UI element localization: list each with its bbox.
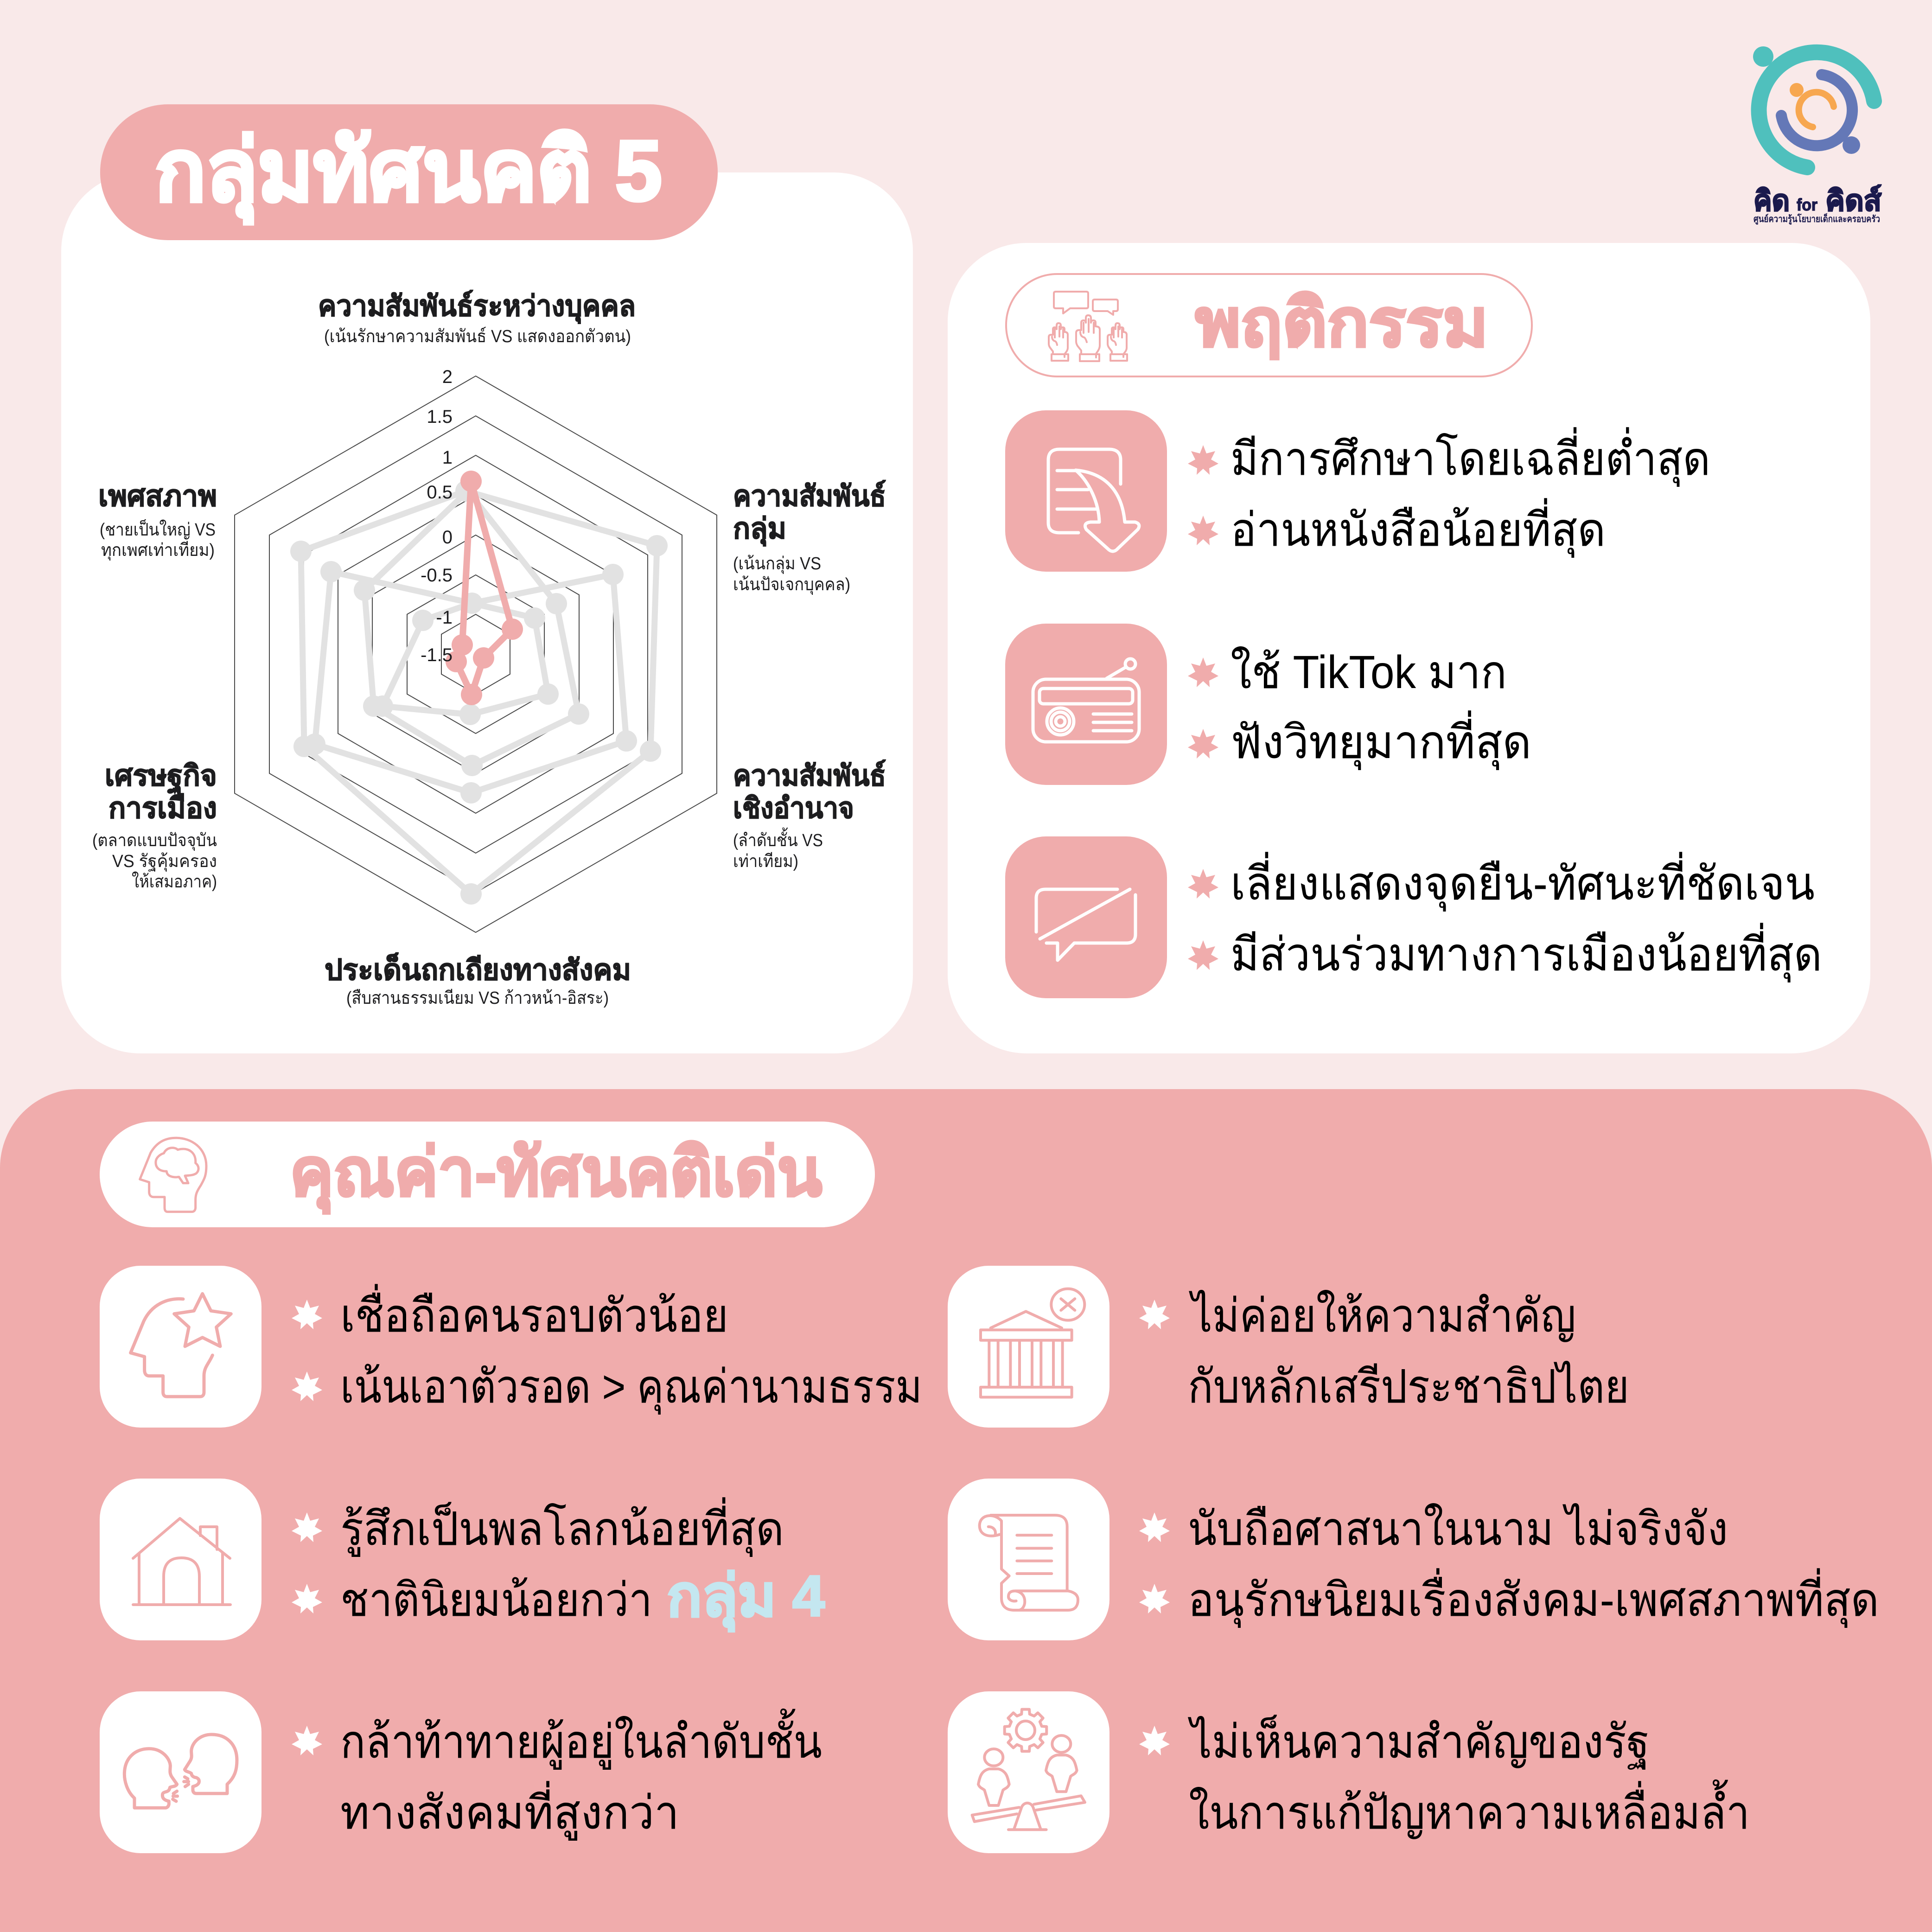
star bullet [1139, 1584, 1170, 1613]
axis label: upper left: (ชายเป็นใหญ่ VS [100, 519, 216, 540]
axis label: upper right [733, 480, 886, 595]
star bullet [1139, 1726, 1170, 1755]
logo wordmark: คิด [1753, 185, 1790, 217]
behaviour row: media [1005, 624, 1531, 785]
axis tick labels: -1 [436, 607, 453, 628]
axis tick labels: 2 [442, 367, 453, 387]
text: ทางสังคมที่สูงกว่า [340, 1781, 679, 1841]
star bullet [292, 1584, 322, 1613]
axis label: bottom: (สืบสานธรรมเนียม VS ก้าวหน้า-อิสระ) [346, 988, 609, 1008]
panel: radar chart card [61, 172, 913, 1053]
axis label: top: ความสัมพันธ์ระหว่างบุคคล [318, 290, 636, 324]
text: เน้นเอาตัวรอด > คุณค่านามธรรม [340, 1361, 922, 1415]
icon: house [133, 1518, 230, 1605]
axis label: lower left: การเมือง [108, 792, 217, 824]
axis label: bottom: ประเด็นถกเถียงทางสังคม [325, 952, 631, 986]
text: เชื่อถือคนรอบตัวน้อย [340, 1284, 728, 1342]
text: รู้สึกเป็นพลโลกน้อยที่สุด [340, 1497, 784, 1557]
star bullet [292, 1726, 322, 1755]
axis tick labels: 1 [442, 447, 453, 468]
logo [1753, 46, 1881, 225]
icon: document with down arrow [1048, 449, 1139, 551]
text: กล้าท้าทายผู้อยู่ในลำดับชั้น [340, 1709, 822, 1770]
axis label: upper left: ทุกเพศเท่าเทียม) [101, 541, 215, 561]
star bullet [1188, 940, 1218, 970]
axis tick labels: 0 [442, 527, 453, 548]
text: ไม่ค่อยให้ความสำคัญ [1189, 1290, 1576, 1342]
title: กลุ่มทัศนคติ 5 [155, 123, 662, 224]
logo wordmark [1753, 185, 1881, 225]
icon: scroll [980, 1515, 1078, 1610]
behaviour heading pill [1006, 274, 1532, 376]
axis label: upper left [98, 480, 217, 561]
star bullet [1188, 516, 1218, 545]
star bullet [1188, 729, 1218, 759]
values row: challenging hierarchy [100, 1691, 822, 1853]
values heading pill [100, 1122, 875, 1227]
icon: raised hands with speech bubbles [1049, 292, 1127, 361]
axis label: lower left: ให้เสมอภาค) [132, 872, 217, 892]
icon: crossed speech bubble [1036, 889, 1135, 960]
axis tick labels: 1.5 [427, 407, 453, 427]
panel: behaviour [948, 243, 1870, 1053]
star bullet [1188, 869, 1218, 899]
text: มีการศึกษาโดยเฉลี่ยต่ำสุด [1231, 427, 1710, 487]
axis label: top: (เน้นรักษาความสัมพันธ์ VS แสดงออกตัวตน) [324, 326, 631, 346]
star bullet [292, 1512, 322, 1542]
text: ในการแก้ปัญหาความเหลื่อมล้ำ [1189, 1779, 1750, 1839]
values row: religion and conservatism [948, 1479, 1879, 1640]
axis label: upper right: กลุ่ม [733, 513, 786, 546]
text: ฟังวิทยุมากที่สุด [1231, 710, 1531, 771]
text: กับหลักเสรีประชาธิปไตย [1188, 1361, 1629, 1413]
highlighted text: group 4: กลุ่ม 4 [667, 1564, 825, 1632]
text: อนุรักษนิยมเรื่องสังคม-เพศสภาพที่สุด [1188, 1568, 1879, 1628]
star bullet [292, 1300, 322, 1329]
star bullet [1188, 445, 1218, 475]
icon: head with brain [140, 1138, 206, 1212]
text: อ่านหนังสือน้อยที่สุด [1231, 498, 1606, 558]
axis label: lower right: เชิงอำนาจ [733, 792, 854, 824]
behaviour row: education and reading [1005, 410, 1710, 572]
behaviour row: political expression [1005, 836, 1822, 998]
text: ใช้ TikTok มาก [1231, 646, 1507, 698]
icon: head with star [131, 1294, 231, 1396]
axis label: upper right: เน้นปัจเจกบุคคล) [733, 575, 850, 595]
star bullet [1139, 1512, 1170, 1542]
axis label: lower left: VS รัฐคุ้มครอง [112, 852, 217, 872]
behaviour heading: พฤติกรรม [1195, 287, 1488, 360]
icon: people on seesaw with gear [972, 1709, 1085, 1830]
axis label: lower left: (ตลาดแบบปัจจุบัน [92, 831, 217, 851]
icon: radio [1033, 659, 1139, 742]
text: มีส่วนร่วมทางการเมืองน้อยที่สุด [1231, 923, 1822, 983]
star bullet [1139, 1300, 1170, 1329]
axis label: top [318, 290, 636, 346]
axis label: upper left: เพศสภาพ [98, 480, 217, 512]
logo wordmark: ศูนย์ความรู้นโยบายเด็กและครอบครัว [1753, 213, 1880, 225]
gray comparison series [290, 480, 668, 905]
values row: trust [100, 1266, 922, 1428]
star bullet [292, 1371, 322, 1401]
axis label: lower left: เศรษฐกิจ [105, 760, 217, 794]
axis label: lower right [733, 759, 886, 871]
title pill [100, 104, 718, 240]
icon: institution with x mark [981, 1289, 1084, 1397]
icon: two talking heads [124, 1734, 237, 1808]
axis tick labels: -1.5 [421, 645, 453, 665]
panel: values [0, 1089, 1932, 1932]
values row: democracy [948, 1266, 1629, 1428]
text: ชาตินิยมน้อยกว่า [340, 1574, 652, 1626]
radar chart [92, 290, 886, 1008]
text: ไม่เห็นความสำคัญของรัฐ [1188, 1714, 1650, 1770]
axis tick labels: -0.5 [421, 565, 453, 586]
axis label: bottom [325, 952, 631, 1008]
values row: global citizen [100, 1479, 825, 1640]
axis tick labels [421, 367, 453, 665]
axis tick labels: 0.5 [427, 482, 453, 503]
pink series: group 5 [446, 471, 523, 705]
axis label: lower right: ความสัมพันธ์ [733, 759, 886, 792]
star bullet [1188, 657, 1218, 687]
text: นับถือศาสนาในนาม ไม่จริงจัง [1188, 1503, 1728, 1555]
axis label: upper right: ความสัมพันธ์ [733, 480, 886, 512]
axis label: lower left [92, 760, 217, 892]
values heading: คุณค่า-ทัศนคติเด่น [290, 1136, 822, 1214]
values row: state and inequality [948, 1691, 1750, 1853]
axis label: upper right: (เน้นกลุ่ม VS [733, 554, 821, 574]
logo wordmark: for [1797, 195, 1817, 214]
axis label: lower right: เท่าเทียม) [733, 852, 798, 871]
axis label: lower right: (ลำดับชั้น VS [733, 827, 823, 850]
text: เลี่ยงแสดงจุดยืน-ทัศนะที่ชัดเจน [1231, 852, 1815, 912]
logo wordmark: คิดส์ [1825, 185, 1881, 217]
